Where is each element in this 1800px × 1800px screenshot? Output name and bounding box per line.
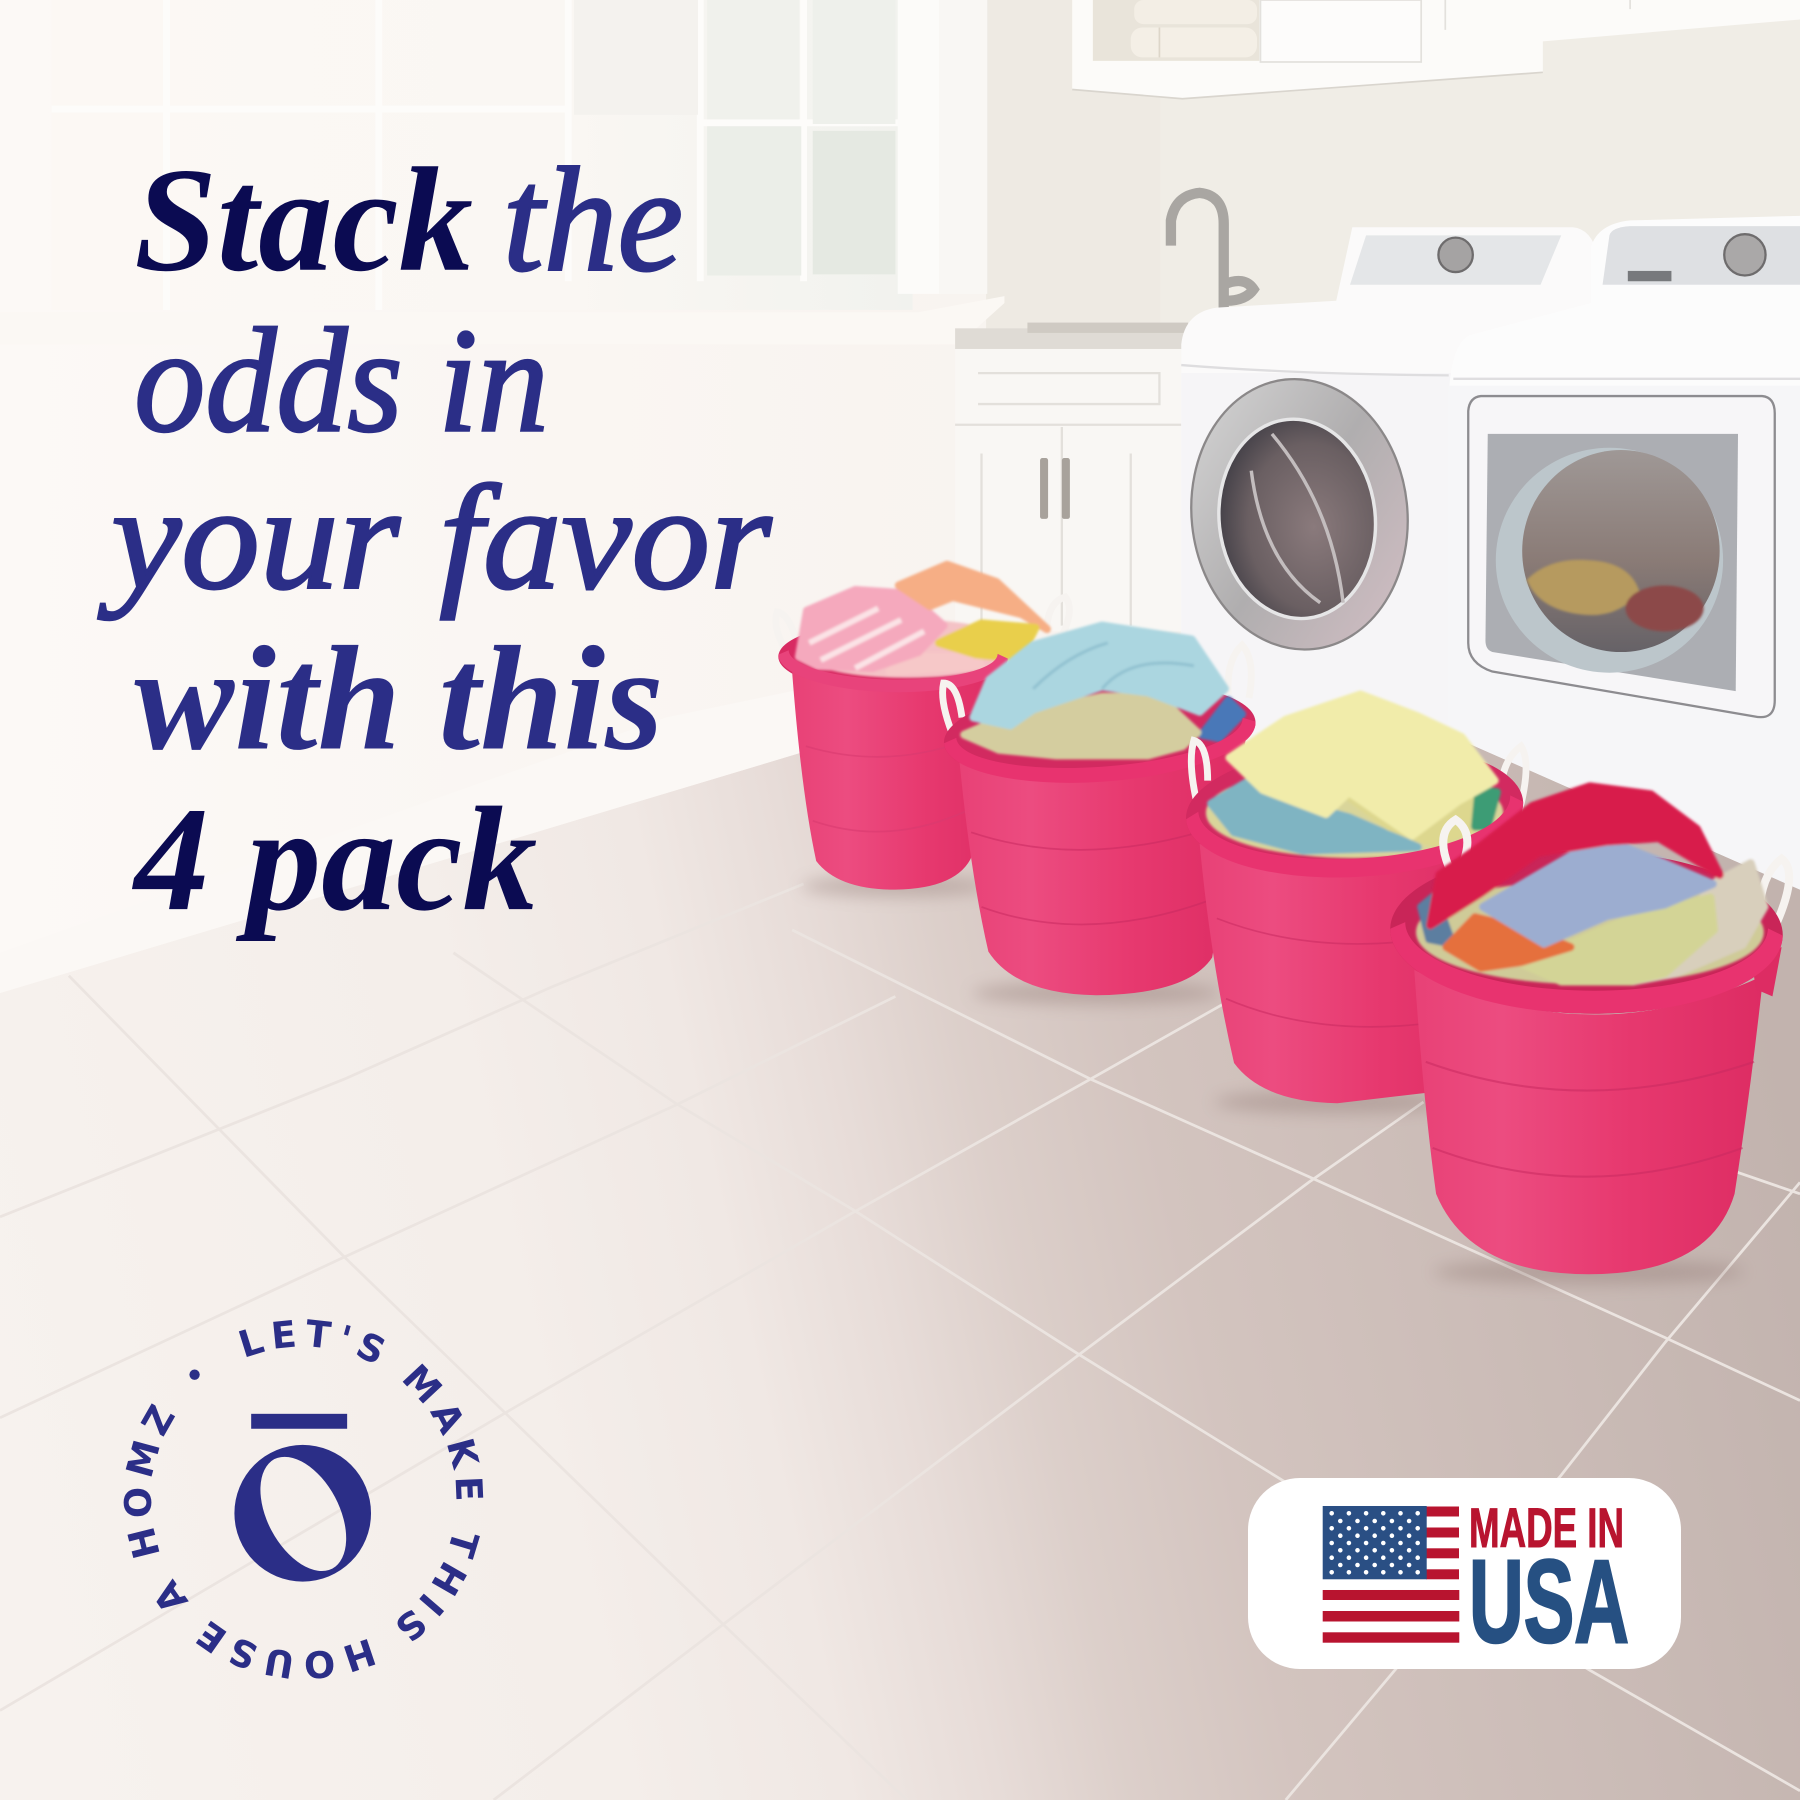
USA text: USA	[1469, 1536, 1629, 1668]
laundry pile	[964, 626, 1242, 755]
rope handles	[1191, 740, 1526, 817]
tub body	[1414, 970, 1763, 1274]
window	[52, 0, 987, 310]
tub 2 with blue laundry	[941, 626, 1259, 995]
floor tile grout	[0, 884, 1800, 1800]
upper cabinets with towels	[1072, 0, 1800, 99]
towels	[1131, 0, 1257, 57]
tub back rim	[941, 672, 1259, 793]
line 1: Stack the: the	[503, 138, 683, 303]
side wall right of window	[986, 0, 1161, 333]
tub front rim	[944, 717, 1259, 793]
baseboard	[0, 689, 804, 993]
rear wall above machines	[1161, 0, 1800, 333]
tub body	[792, 666, 1010, 890]
line 4: with this: with this	[134, 616, 664, 781]
tub front rim	[778, 650, 1008, 694]
tub body	[959, 740, 1246, 995]
rope handles	[943, 645, 1251, 740]
line 1: Stack the: Stack	[134, 138, 473, 303]
dryer knob	[1724, 234, 1766, 276]
dryer control panel	[1603, 226, 1800, 285]
back wall	[0, 0, 1800, 1033]
dryer door grey panel	[1485, 434, 1738, 691]
tub front rim	[1186, 795, 1527, 886]
line 3: your favor: your favor	[98, 456, 772, 621]
american flag	[1323, 1506, 1459, 1643]
washer door glass	[1209, 411, 1385, 626]
dryer door	[1468, 396, 1775, 717]
tub front rim	[1389, 922, 1783, 1017]
line 2: odds in: odds in	[134, 298, 549, 463]
dryer	[1449, 216, 1800, 890]
rope handles	[776, 597, 1069, 657]
tub 3 with yellow laundry	[1183, 695, 1527, 1103]
faucet	[1171, 193, 1254, 315]
circular slogan text: LET'S MAKE THIS HOUSE A HOMZ	[124, 1319, 484, 1679]
laundry inside dryer	[1527, 560, 1704, 631]
floor	[0, 735, 1800, 1800]
tub side tab	[1751, 947, 1782, 996]
washer	[1178, 227, 1600, 740]
washer door ring	[1178, 368, 1421, 660]
tub body	[1200, 838, 1492, 1103]
tub shadows	[801, 876, 1744, 1285]
washer knob	[1438, 238, 1473, 272]
dryer glass	[1522, 450, 1720, 652]
tub 1 with pink laundry	[776, 565, 1069, 890]
separator dot	[189, 1370, 200, 1380]
window sill	[0, 296, 1004, 344]
laundry pile	[799, 565, 1047, 674]
dryer window ring	[1496, 448, 1723, 673]
tub back rim	[778, 621, 1008, 692]
made in text: MADE IN	[1469, 1496, 1624, 1559]
base cabinet and counter	[955, 323, 1188, 631]
washer control panel	[1350, 235, 1561, 285]
rope handles	[1443, 820, 1789, 930]
tub back rim	[1183, 735, 1527, 886]
badge background	[1248, 1478, 1681, 1669]
line 5: 4 pack: 4 pack	[131, 777, 537, 942]
laundry pile	[1420, 786, 1764, 982]
made in USA badge	[1248, 1478, 1681, 1669]
tub back rim	[1389, 847, 1784, 1017]
circular brand logo	[124, 1319, 484, 1679]
headline	[98, 138, 772, 942]
dryer display	[1628, 271, 1671, 281]
logo macron bar	[251, 1414, 347, 1429]
laundry pile	[1210, 695, 1499, 854]
logo letter o	[234, 1445, 371, 1582]
tub 4 with red laundry	[1389, 786, 1789, 1274]
line 1: Stack the	[134, 138, 683, 303]
cabinet handles	[1040, 458, 1070, 519]
